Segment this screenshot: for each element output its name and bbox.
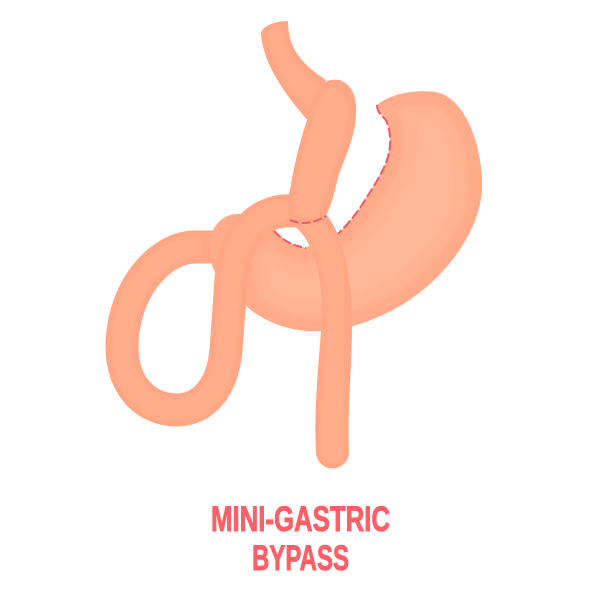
staple line: stomach xyxy=(338,105,390,234)
descending limb xyxy=(294,215,352,468)
infographic: mini-gastric bypass xyxy=(106,21,482,571)
title line 1: MINI-GASTRIC xyxy=(211,500,390,539)
esophagus xyxy=(261,21,326,124)
stomach xyxy=(240,91,482,331)
title line 2: BYPASS xyxy=(252,539,349,578)
staple line: pouch xyxy=(290,216,326,223)
upper limb of loop over bulge xyxy=(229,211,296,312)
stomach bulge over loop end xyxy=(210,214,256,287)
staple line: lower stomach xyxy=(274,231,306,248)
intestine loop xyxy=(122,211,296,410)
gastric pouch xyxy=(288,80,356,224)
title xyxy=(211,500,390,578)
